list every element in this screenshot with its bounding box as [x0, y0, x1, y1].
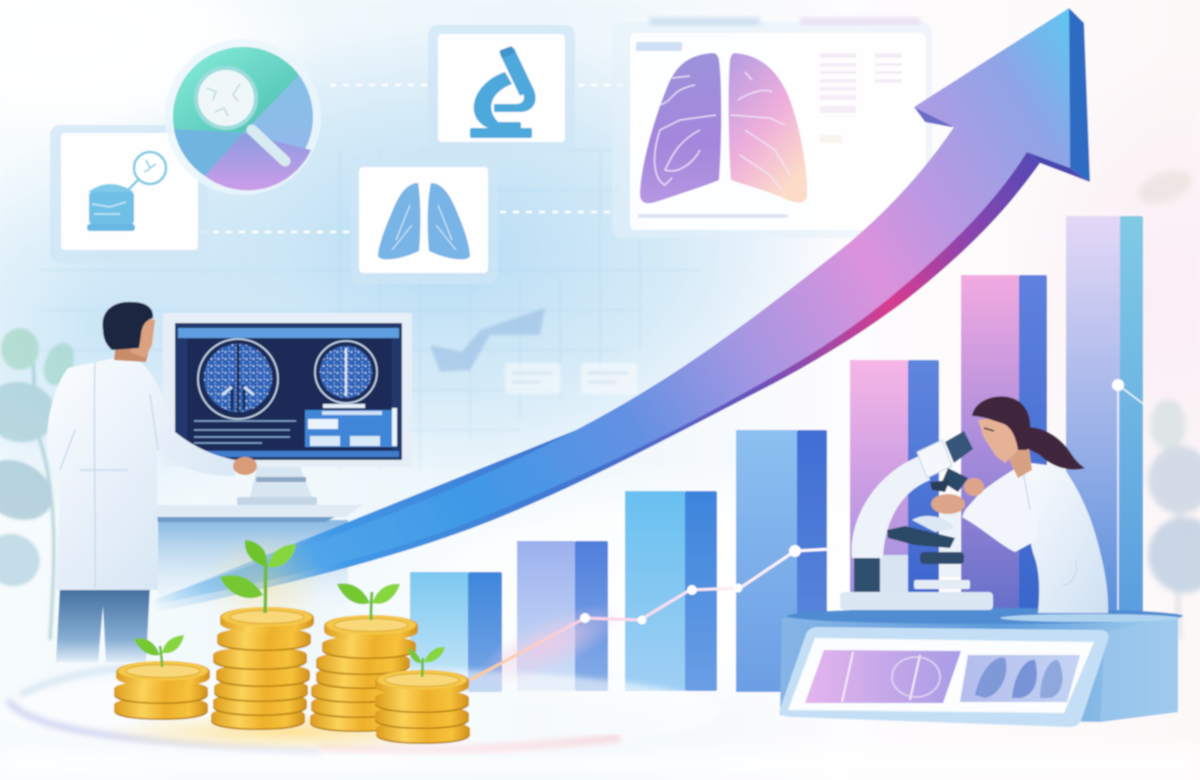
scan info box [305, 404, 397, 447]
scientist at microscope [931, 396, 1108, 613]
arrow head right face [1069, 8, 1090, 182]
circular magnifier badge [165, 39, 321, 195]
researcher at monitor [47, 302, 257, 662]
microscope stages [887, 526, 955, 548]
arrow side shade [155, 152, 1040, 612]
badge segment: teal [173, 47, 299, 133]
panel: large lung scan [612, 18, 932, 238]
left foliage [0, 328, 80, 640]
blue wash below desk [158, 520, 348, 610]
icon: jar with magnified sample [87, 152, 166, 231]
brain scan left [198, 339, 278, 419]
sprout: front stack [408, 647, 445, 677]
sprout: medium stack [337, 584, 400, 620]
monitor [157, 313, 412, 522]
stack: tall [211, 607, 314, 730]
ponytail [1026, 427, 1085, 470]
stack: small left [114, 661, 210, 720]
monitor stand [237, 467, 317, 505]
sleeve [962, 465, 1038, 552]
badge segment: purple [205, 133, 311, 190]
bar 2 [517, 541, 608, 691]
bar 6 [961, 275, 1047, 615]
hand [233, 457, 257, 475]
sprouts [134, 540, 445, 677]
faded schematic notes [430, 308, 637, 394]
growth arrow [153, 8, 1090, 612]
bar 7 [1066, 216, 1143, 614]
monitor screen [175, 323, 402, 460]
microscope base [840, 592, 993, 610]
microscope arm [852, 455, 930, 558]
coin stacks [100, 530, 480, 752]
icon: magnifying glass [196, 68, 285, 161]
platform [780, 608, 1183, 722]
card: microscope icon [428, 25, 575, 153]
large lungs image [640, 53, 807, 203]
tablet with scans [780, 627, 1108, 727]
head [103, 302, 155, 362]
lab coat [1013, 462, 1108, 613]
stack: medium [310, 615, 418, 732]
head [972, 396, 1085, 478]
desk [157, 505, 363, 522]
icon: microscope [470, 46, 536, 138]
arrow head left bevel [914, 107, 954, 127]
floor ellipse [0, 668, 1200, 780]
arrow head lower bevel [1027, 152, 1090, 182]
stack: front [375, 670, 470, 744]
card: small lungs [351, 158, 498, 284]
card: sample jar icon [50, 125, 208, 263]
hands [931, 478, 984, 514]
microscope head [917, 440, 952, 478]
faint corner leaf [1134, 163, 1196, 211]
trend line [467, 379, 1145, 702]
sprout: left stack [134, 635, 184, 667]
bar 3 [625, 491, 717, 691]
benchtop microscope [840, 431, 993, 610]
badge segment: blue [174, 129, 243, 176]
arrow shaft and head face [153, 8, 1070, 605]
bar 4 [736, 430, 827, 692]
brain scan right [315, 341, 377, 403]
microscope column [880, 555, 908, 592]
bar chart [410, 216, 1143, 692]
trousers [56, 586, 150, 662]
tablet screen [788, 638, 1094, 713]
sprout: tall stack [220, 540, 296, 613]
right foliage [1148, 399, 1200, 640]
bar 1 [410, 572, 502, 692]
faded data rows [820, 53, 902, 143]
bar 5 [850, 360, 939, 622]
icon: lungs [378, 183, 470, 259]
lab coat [47, 358, 235, 590]
